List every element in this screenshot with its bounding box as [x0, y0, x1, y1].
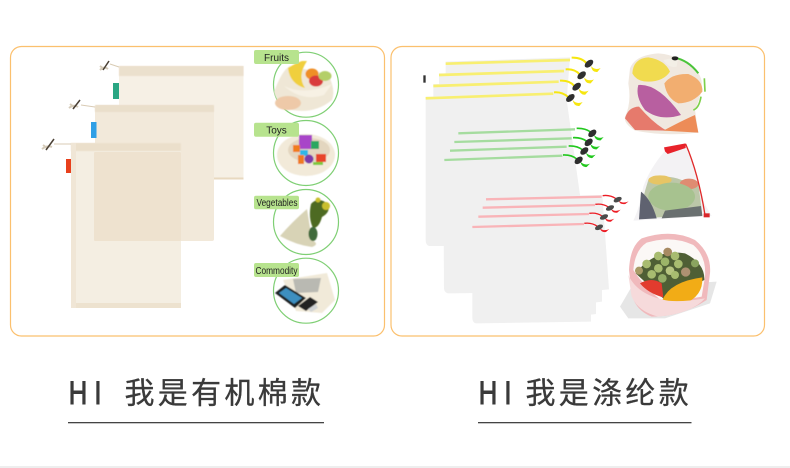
- tag: red: [66, 159, 71, 173]
- panel: organic cotton bags: [10, 46, 384, 336]
- large cotton bag: [100, 61, 244, 180]
- usage: vegetables: [254, 190, 338, 254]
- icon: cord toggle: [69, 100, 80, 109]
- medium cotton bag: [69, 100, 214, 241]
- label: Toys: Toys: [266, 126, 287, 136]
- label: Vegetables: Vegetables: [256, 198, 298, 209]
- photo: open mesh bag with grapes, pepper and mango: [620, 234, 717, 318]
- panel: polyester mesh bags: [391, 46, 764, 336]
- underline: polyester heading: [478, 422, 692, 423]
- tag: blue: [91, 122, 96, 138]
- label: Fruits: Fruits: [264, 53, 289, 64]
- red bags: [472, 195, 629, 323]
- heading: organic cotton: 我是有机棉款: [124, 368, 324, 412]
- photo: mesh bag with fruit: [625, 53, 705, 134]
- underline: organic cotton heading: [68, 422, 324, 423]
- label: Commodity: Commodity: [256, 266, 298, 277]
- usage: commodity: [254, 258, 338, 323]
- footer band: [0, 466, 790, 468]
- photo: mesh bag with grapes: [633, 143, 712, 221]
- yellow bags: [423, 57, 601, 246]
- icon: cord toggle: [100, 61, 109, 70]
- heading: organic cotton: HI: [69, 376, 109, 412]
- green bags: [443, 128, 604, 293]
- icon: cord toggle: [42, 139, 54, 150]
- heading: polyester: 我是涤纶款: [526, 368, 692, 412]
- small cotton bag: [42, 139, 181, 308]
- heading: polyester: HI: [479, 376, 519, 412]
- tag: teal: [113, 83, 119, 99]
- usage: fruits: [254, 50, 338, 117]
- flat mesh bag stack: [423, 57, 629, 323]
- usage: toys: [254, 120, 338, 186]
